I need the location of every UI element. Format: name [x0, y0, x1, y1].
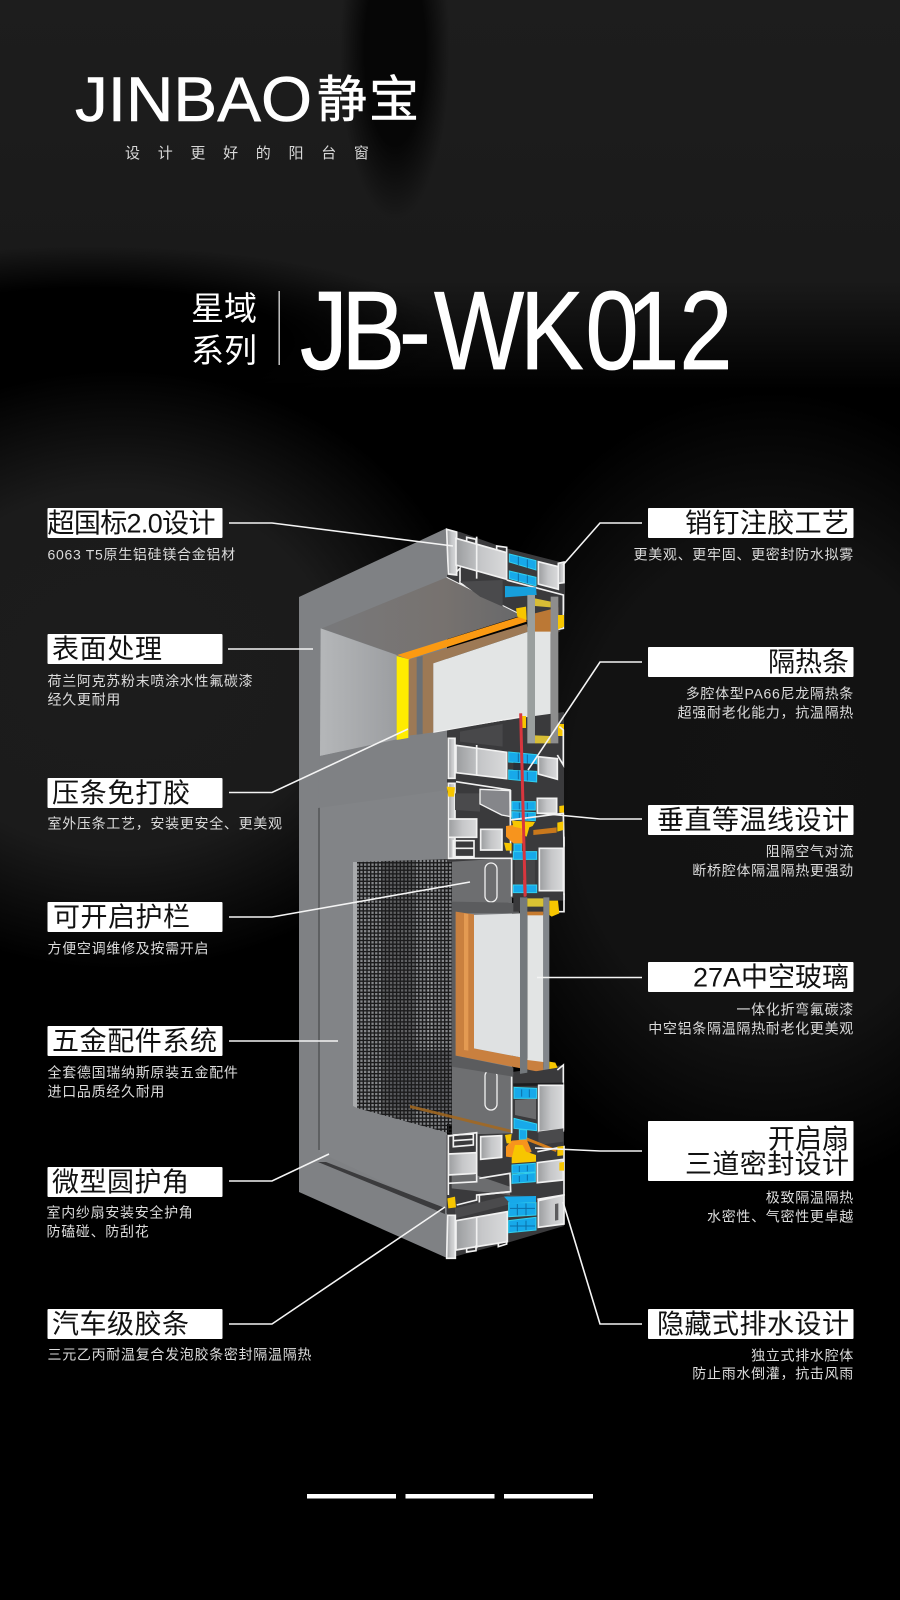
label: 隐藏式排水设计 — [648, 1309, 854, 1382]
label: 表面处理: 表面处理 — [52, 634, 162, 664]
label: 开启扇三道密封设计: 水密性、气密性更卓越 — [707, 1208, 854, 1224]
middle aluminium profile — [433, 713, 564, 900]
label: 垂直等温线设计: 阻隔空气对流 — [766, 844, 854, 860]
logo — [75, 65, 419, 135]
label: 隐藏式排水设计: 独立式排水腔体 — [751, 1348, 854, 1364]
label: 27A中空玻璃: 27A中空玻璃 — [693, 962, 849, 992]
label: 五金配件系统: 全套德国瑞纳斯原装五金配件 — [48, 1064, 239, 1080]
label: 隔热条 — [648, 647, 854, 720]
label: 隐藏式排水设计: 隐藏式排水设计 — [657, 1310, 849, 1340]
leader: 压条免打胶 — [229, 729, 408, 792]
label: 五金配件系统: 进口品质经久耐用 — [48, 1084, 165, 1100]
label: 汽车级胶条: 汽车级胶条 — [52, 1310, 189, 1340]
label: 开启扇三道密封设计: 三道密封设计 — [685, 1150, 849, 1180]
label: 销钉注胶工艺: 销钉注胶工艺 — [685, 508, 849, 538]
window body front face — [299, 528, 447, 1258]
label: 销钉注胶工艺 — [634, 508, 854, 562]
label: 隔热条: 隔热条 — [768, 648, 849, 678]
label: 销钉注胶工艺: 更美观、更牢固、更密封防水拟雾 — [634, 546, 854, 562]
label: 汽车级胶条: 三元乙丙耐温复合发泡胶条密封隔温隔热 — [48, 1346, 312, 1362]
label: 垂直等温线设计: 断桥腔体隔温隔热更强劲 — [692, 862, 854, 878]
label: 超国标2.0设计: 6063 T5原生铝硅镁合金铝材 — [48, 546, 236, 562]
label: 可开启护栏 — [48, 902, 222, 956]
label: 表面处理 — [48, 634, 253, 708]
series name: 星域 — [191, 290, 257, 327]
leader: 表面处理 — [228, 648, 313, 650]
leader: 垂直等温线设计 — [537, 813, 642, 819]
logo: JINBAO — [75, 65, 312, 135]
leader: 开启扇三道密封设计 — [535, 1148, 642, 1151]
leader: 销钉注胶工艺 — [563, 523, 642, 565]
series name: 系列 — [191, 332, 257, 369]
label: 开启扇三道密封设计: 极致隔温隔热 — [766, 1190, 854, 1206]
tagline: 设计更好的阳台窗 — [125, 144, 387, 162]
label: 微型圆护角: 室内纱扇安装安全护角 — [46, 1204, 194, 1220]
model number: JB-WK012 — [300, 268, 732, 393]
section dark backing — [447, 712, 564, 1258]
label: 微型圆护角: 微型圆护角 — [52, 1168, 189, 1198]
label: 隔热条: 超强耐老化能力，抗温隔热 — [678, 704, 854, 720]
section top backing — [447, 530, 565, 632]
series divider — [278, 291, 280, 365]
label: 五金配件系统 — [48, 1026, 239, 1100]
leader: 隔热条 — [528, 662, 642, 770]
leader: 可开启护栏 — [229, 882, 470, 917]
label: 垂直等温线设计 — [648, 805, 854, 878]
lower transom front — [318, 731, 447, 808]
label: 隐藏式排水设计: 防止雨水倒灌，抗击风雨 — [692, 1366, 854, 1382]
label: 表面处理: 荷兰阿克苏粉末喷涂水性氟碳漆 — [48, 673, 253, 689]
leader: 微型圆护角 — [229, 1154, 329, 1181]
series name — [191, 290, 257, 369]
label: 超国标2.0设计 — [48, 508, 236, 562]
label: 压条免打胶 — [48, 778, 283, 832]
label: 隔热条: 多腔体型PA66尼龙隔热条 — [686, 686, 854, 702]
label: 压条免打胶: 压条免打胶 — [52, 778, 190, 808]
label: 汽车级胶条 — [48, 1309, 312, 1362]
label: 27A中空玻璃: 一体化折弯氟碳漆 — [736, 1002, 854, 1018]
label: 五金配件系统: 五金配件系统 — [52, 1026, 217, 1056]
upper window opening — [320, 577, 558, 756]
leader: 27A中空玻璃 — [537, 976, 642, 978]
bottom aluminium profile — [447, 1065, 564, 1258]
label: 开启扇三道密封设计 — [648, 1121, 854, 1224]
label: 微型圆护角: 防磕碰、防刮花 — [46, 1224, 149, 1240]
leader: 五金配件系统 — [229, 1040, 338, 1042]
label: 可开启护栏: 可开启护栏 — [53, 902, 190, 932]
label: 超国标2.0设计: 超国标2.0设计 — [48, 508, 216, 538]
label: 垂直等温线设计: 垂直等温线设计 — [657, 806, 849, 836]
leader: 汽车级胶条 — [229, 1207, 445, 1324]
leader: 隐藏式排水设计 — [563, 1202, 642, 1324]
label: 表面处理: 经久更耐用 — [48, 692, 121, 708]
label: 27A中空玻璃: 中空铝条隔温隔热耐老化更美观 — [648, 1020, 854, 1036]
label: 开启扇三道密封设计: 开启扇 — [768, 1124, 849, 1154]
label: 可开启护栏: 方便空调维修及按需开启 — [48, 940, 209, 956]
lower glazing unit — [452, 880, 564, 1082]
insect screen panel — [353, 854, 512, 1136]
thermal break strips top — [505, 554, 537, 597]
upper aluminium profile — [447, 529, 564, 743]
label: 微型圆护角 — [46, 1167, 222, 1240]
leader: 超国标2.0设计 — [229, 523, 453, 546]
window cross-section illustration — [299, 528, 565, 1258]
logo: 静宝 — [317, 72, 419, 128]
pagination bars — [307, 1494, 593, 1498]
double glazing panes top — [516, 595, 564, 743]
label: 压条免打胶: 室外压条工艺，安装更安全、更美观 — [48, 816, 283, 832]
label: 27A中空玻璃 — [648, 962, 854, 1036]
